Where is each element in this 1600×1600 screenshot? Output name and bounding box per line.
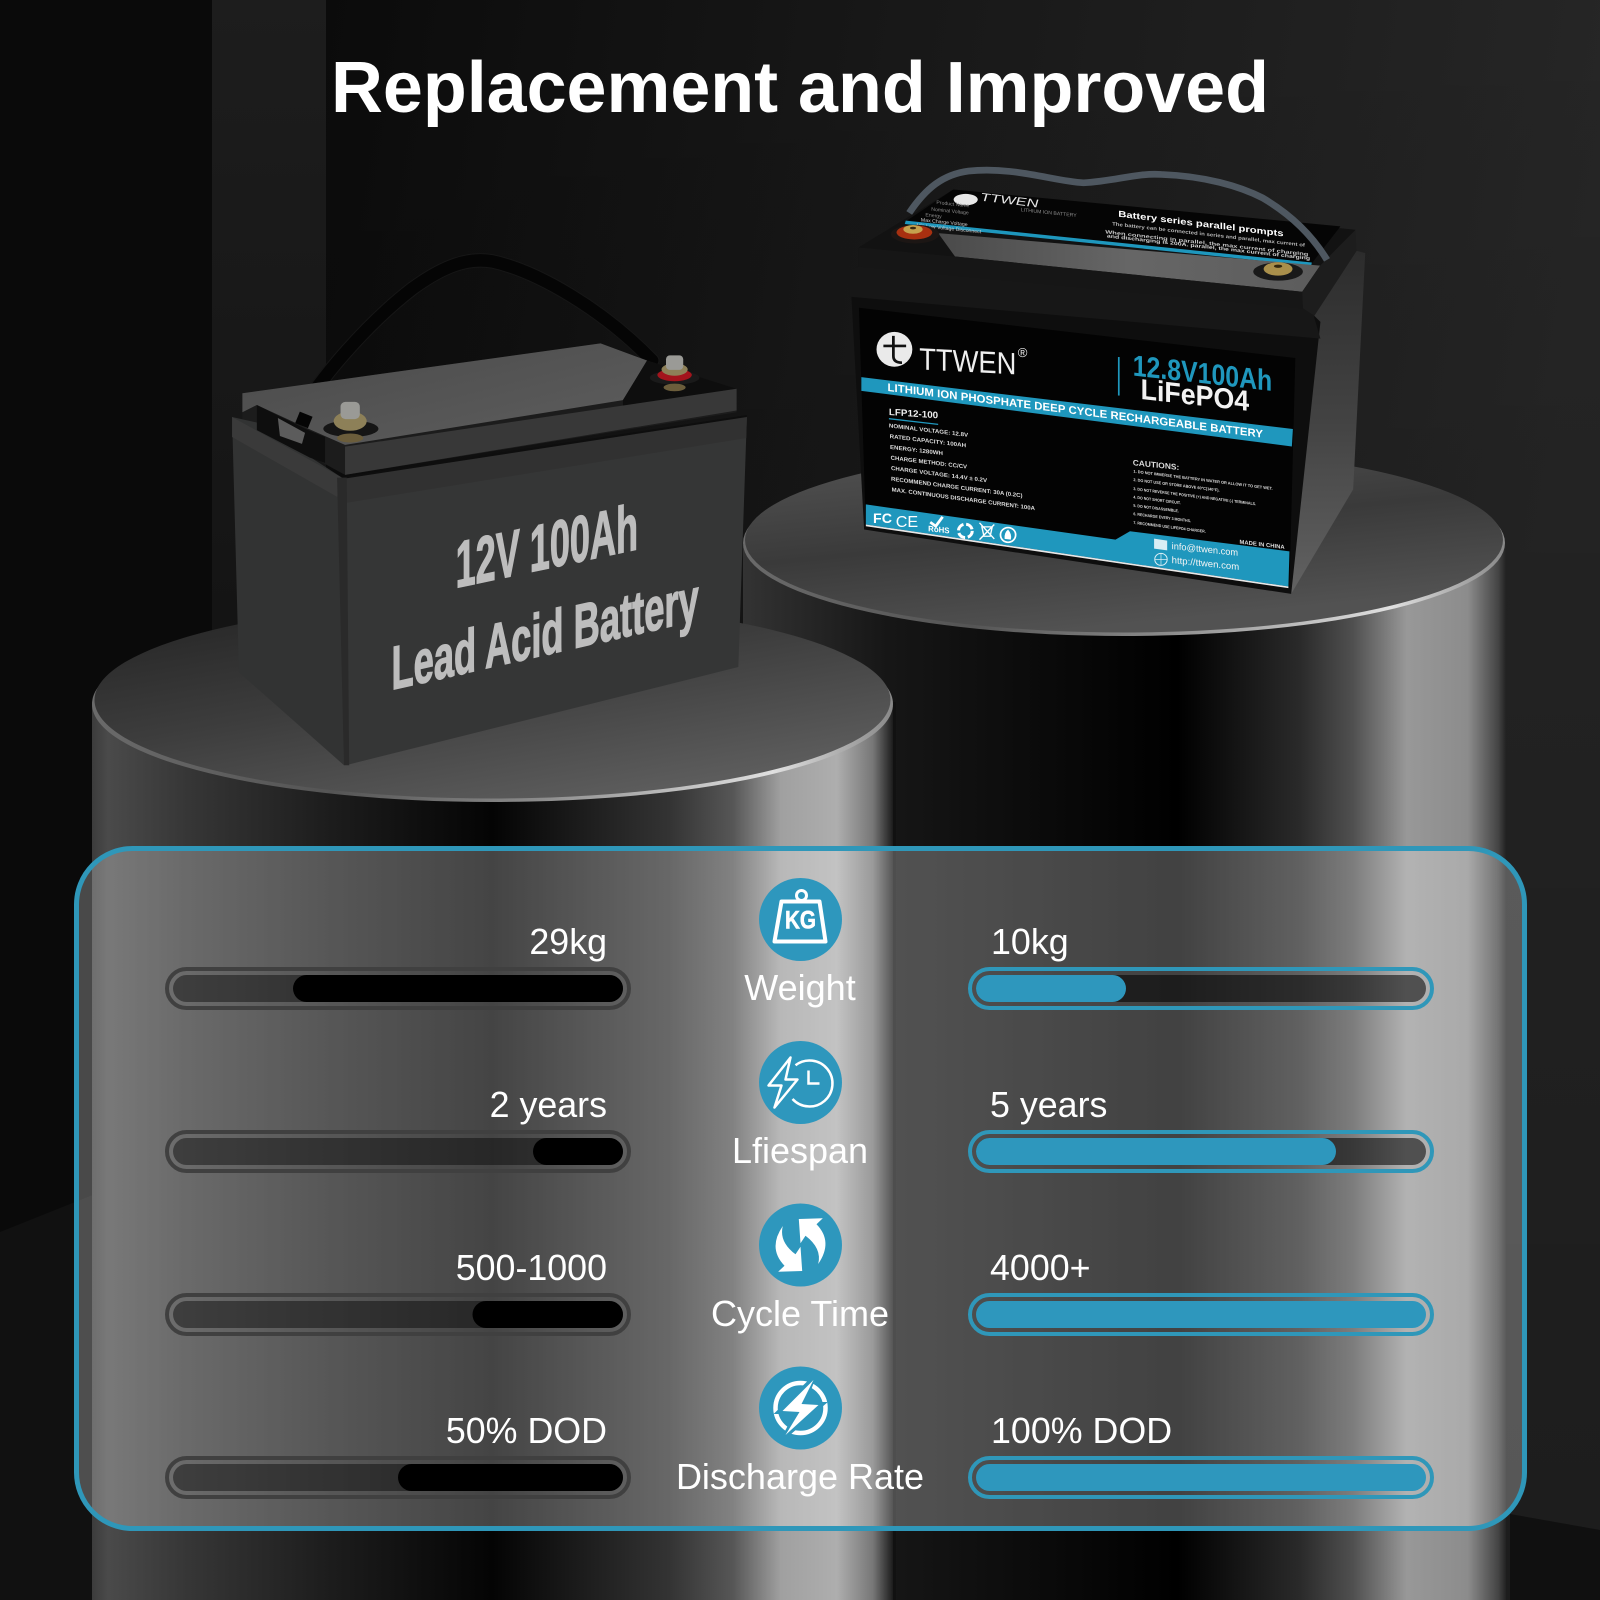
row: weight lead acid bar	[167, 922, 629, 1008]
text: Lead Acid Battery: Lead Acid Battery	[392, 566, 699, 704]
lid top	[242, 343, 737, 475]
battery side face	[232, 417, 344, 765]
certification marks: CE	[896, 514, 918, 531]
title: Replacement and Improved	[331, 48, 1269, 128]
row: weight lithium bar: 10kg	[991, 922, 1069, 962]
cautions: 7. RECOMMEND USE LIFEPO4 CHARGER.	[1133, 520, 1206, 534]
top label info: Max Charge Voltage	[921, 217, 968, 228]
contact details: http://ttwen.com	[1172, 555, 1239, 573]
label: cycle time: Cycle Time	[711, 1293, 889, 1334]
specifications: MAX. CONTINUOUS DISCHARGE CURRENT: 100A	[892, 487, 1036, 512]
specifications: NOMINAL VOLTAGE: 12.8V	[889, 423, 968, 439]
handle strap	[909, 170, 1327, 260]
row: discharge lead acid bar: 50% DOD	[446, 1411, 607, 1451]
handle notch	[257, 405, 325, 463]
blue footer	[866, 504, 1289, 586]
row: lifespan lithium bar	[970, 1085, 1432, 1171]
top label info: Product Name	[936, 200, 970, 209]
specifications: CHARGE VOLTAGE: 14.4V ± 0.2V	[891, 466, 987, 484]
lead acid battery	[232, 260, 747, 765]
specifications: RECOMMEND CHARGE CURRENT: 30A (0.2C)	[891, 477, 1023, 499]
top label info	[916, 200, 1077, 235]
registered mark: ®	[1018, 345, 1028, 360]
top label info: Energy	[925, 212, 942, 220]
row: cycle time lithium bar	[970, 1248, 1432, 1334]
cautions: 6. RECHARGE EVERY 3 MONTHS.	[1133, 511, 1191, 523]
lid and top label	[850, 190, 1357, 339]
row: discharge lithium bar	[970, 1411, 1432, 1497]
panel: comparison	[76, 848, 1524, 1528]
certification marks	[873, 511, 1016, 542]
band text: LITHIUM ION PHOSPHATE DEEP CYCLE RECHARGEABLE BATTERY	[888, 382, 1263, 441]
chemistry: LiFePO4	[1141, 373, 1250, 418]
row: cycle time lithium bar: 4000+	[990, 1248, 1091, 1288]
label: discharge rate: Discharge Rate	[676, 1456, 924, 1497]
top label info: LITHIUM ION BATTERY	[1021, 207, 1077, 219]
terminal positive	[891, 225, 939, 243]
label: weight: Weight	[744, 967, 856, 1008]
label edge	[866, 525, 1288, 588]
row: weight lead acid bar: 29kg	[529, 922, 607, 962]
left cylinder pedestal	[92, 602, 896, 1600]
row: lifespan lead acid bar	[167, 1085, 629, 1171]
cautions: 4. DO NOT SHORT CIRCUIT.	[1133, 494, 1181, 505]
origin: MADE IN CHINA	[1240, 540, 1285, 551]
battery front body	[850, 270, 1320, 594]
icon: weight	[759, 878, 842, 961]
specifications: RATED CAPACITY: 100AH	[890, 434, 966, 449]
row: weight lithium bar	[970, 922, 1432, 1008]
top label info: Nominal Voltage	[931, 207, 969, 216]
divider	[1118, 357, 1120, 396]
specifications: CHARGE METHOD: CC/CV	[891, 456, 967, 471]
logo	[877, 332, 912, 367]
icon: cycle	[759, 1204, 842, 1286]
battery handle strap	[297, 260, 652, 417]
certification marks: FC	[873, 511, 892, 527]
row: discharge lead acid bar	[167, 1411, 629, 1497]
label: lifespan: Lfiespan	[732, 1130, 868, 1171]
top label prompts: When connecting in parallel, the max current of charging	[1105, 229, 1308, 258]
top label prompts: Battery series parallel prompts	[1118, 209, 1284, 238]
row: discharge lithium bar: 100% DOD	[991, 1411, 1172, 1451]
icon: discharge	[759, 1366, 842, 1450]
cautions	[1133, 458, 1273, 534]
row: cycle time lead acid bar: 500-1000	[456, 1248, 607, 1288]
cautions: 5. DO NOT DISASSEMBLE.	[1133, 503, 1179, 513]
top logo text: TTWEN	[981, 192, 1039, 211]
row: cycle time lead acid bar	[167, 1248, 629, 1334]
right cylinder pedestal	[743, 448, 1506, 1600]
cautions: 2. DO NOT USE OR STORE ABOVE 60°C(140°F).	[1133, 477, 1220, 493]
model: LFP12-100	[889, 407, 938, 421]
contact details	[1154, 539, 1239, 573]
cautions: CAUTIONS:	[1133, 458, 1179, 472]
icon: lifespan	[759, 1041, 842, 1124]
top label prompts: The battery can be connected in series and parallel, max current of	[1112, 221, 1305, 249]
contact details: info@ttwen.com	[1172, 541, 1238, 559]
certification marks: RoHS	[928, 524, 950, 535]
icon: weight: KG	[785, 906, 816, 934]
row: lifespan lead acid bar: 2 years	[490, 1085, 607, 1125]
top label prompts: and discharging is 200A. parallel, the max current of charging	[1107, 233, 1310, 262]
terminal left	[323, 402, 378, 443]
text: 12V 100Ah: 12V 100Ah	[456, 491, 638, 603]
front label	[859, 308, 1295, 588]
specifications: ENERGY: 1280WH	[890, 445, 943, 457]
terminal right	[650, 355, 699, 391]
specifications	[889, 423, 1036, 512]
terminal negative	[1253, 262, 1303, 281]
top label info: Min Low Voltage Disconnect	[916, 223, 982, 235]
brand name: TTWEN	[919, 342, 1016, 381]
top label prompts	[1105, 209, 1310, 262]
capacity: 12.8V100Ah	[1133, 350, 1272, 398]
lithium battery	[850, 170, 1365, 594]
battery side face	[1291, 251, 1365, 594]
row: lifespan lithium bar: 5 years	[990, 1085, 1107, 1125]
battery front face	[337, 415, 747, 765]
cautions: 1. DO NOT IMMERSE THE BATTERY IN WATER OR ALLOW IT TO GET WET.	[1133, 469, 1273, 491]
cautions: 3. DO NOT REVERSE THE POSITIVE (+) AND NEGATIVE (-) TERMINALS.	[1133, 486, 1256, 506]
blue band	[861, 377, 1293, 446]
